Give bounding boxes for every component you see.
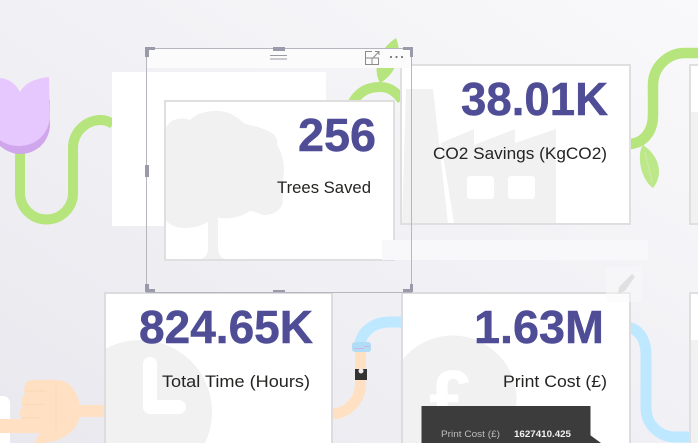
white backing rectangle	[112, 72, 326, 226]
value: 38.01K	[461, 73, 608, 125]
tooltip: 1627410.425	[514, 429, 572, 440]
pale strip	[382, 240, 648, 260]
label: CO2 Savings (KgCO2)	[433, 145, 607, 163]
blue stem middle	[360, 322, 403, 343]
blue stem right	[628, 327, 692, 437]
icon: pound coin	[403, 336, 517, 443]
label: Trees Saved	[277, 179, 371, 197]
card: trees saved	[165, 101, 394, 260]
card: total time	[104, 292, 333, 443]
icon: factory	[402, 89, 556, 223]
edit button with pencil icon	[606, 267, 642, 302]
label: Print Cost (£)	[503, 373, 607, 391]
tooltip: Print Cost (£)	[441, 429, 500, 440]
card: CO2 savings	[401, 65, 630, 224]
left card edge	[0, 396, 10, 443]
tooltip	[422, 406, 601, 443]
green stem: top middle with leaf	[352, 38, 402, 104]
card: print cost	[401, 292, 631, 443]
icon: more options	[390, 56, 403, 58]
icon: tree	[166, 111, 284, 259]
arm with watch and cuff	[332, 342, 371, 414]
icon: focus mode	[366, 52, 379, 64]
selection frame	[145, 47, 413, 292]
green stem right with leaf	[628, 53, 698, 188]
value: 256	[298, 109, 376, 161]
tulip with green stem	[0, 77, 113, 220]
right edge cards	[689, 64, 698, 443]
hand pointing left	[0, 380, 104, 443]
value: 824.65K	[139, 301, 313, 353]
value: 1.63M	[474, 301, 604, 353]
visual header band	[147, 49, 412, 68]
icon: pound coin: £	[430, 356, 472, 441]
label: Total Time (Hours)	[162, 373, 310, 391]
icon: clock	[106, 340, 212, 443]
